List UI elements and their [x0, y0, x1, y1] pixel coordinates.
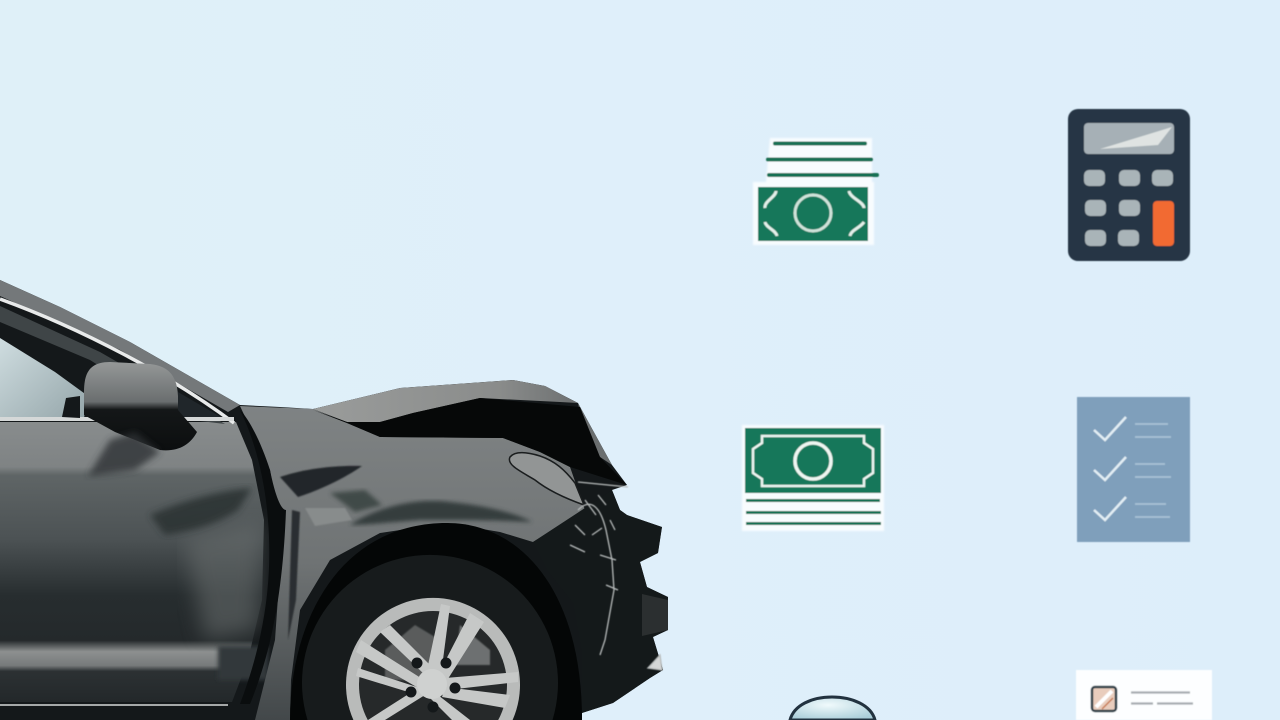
tyre: [302, 555, 558, 720]
headlight: [509, 453, 584, 505]
crumpled hood gap: [313, 398, 627, 485]
window glass: [0, 338, 88, 418]
fender crumple: [330, 490, 382, 512]
wing mirror: [84, 362, 197, 450]
fender streak: [350, 501, 532, 525]
icon: banknote with stack: [742, 425, 884, 531]
icon: stacked money top: [753, 138, 877, 245]
bumper block: [642, 594, 668, 636]
orange key: [1153, 201, 1174, 246]
icon: calculator: [1068, 109, 1190, 261]
door trim end shadow: [218, 646, 268, 680]
sill chrome: [0, 417, 234, 421]
glow: [753, 138, 874, 245]
alloy wheel: [346, 598, 520, 720]
door panel: [0, 422, 264, 702]
door crease: [150, 488, 252, 535]
door highlight right: [185, 520, 262, 640]
door gap: [240, 410, 286, 704]
hood: [313, 380, 578, 422]
keys: [1084, 170, 1173, 246]
window frame dark: [0, 306, 225, 424]
door lower trim line: [0, 704, 228, 706]
chrome window trim: [0, 299, 234, 423]
checks: [1094, 417, 1126, 520]
banknote: [745, 428, 881, 493]
banknote: [758, 187, 868, 241]
mirror reflection on door: [88, 432, 160, 476]
illustration: damaged car: [0, 280, 668, 720]
stack lines: [768, 144, 877, 175]
checkbox: [1092, 687, 1116, 711]
car body silhouette: [0, 280, 668, 720]
fender dent: [280, 466, 362, 497]
glow: [742, 425, 884, 531]
icon: checklist: [1077, 397, 1190, 542]
fender panel: [240, 406, 585, 720]
text lines: [1135, 424, 1171, 517]
wheel brake shadows: [385, 625, 440, 680]
wheel arch: [290, 523, 582, 720]
text lines: [1131, 692, 1193, 704]
icon: document card: [1076, 670, 1212, 720]
stack lines: [746, 500, 881, 524]
mirror mount: [62, 396, 80, 418]
roof pillar: [0, 280, 240, 412]
icon: magnifier top: [790, 697, 875, 720]
spokes: [356, 604, 518, 720]
wreck mass: [533, 490, 668, 713]
screen: [1084, 123, 1174, 154]
wreckage details: [570, 482, 662, 670]
